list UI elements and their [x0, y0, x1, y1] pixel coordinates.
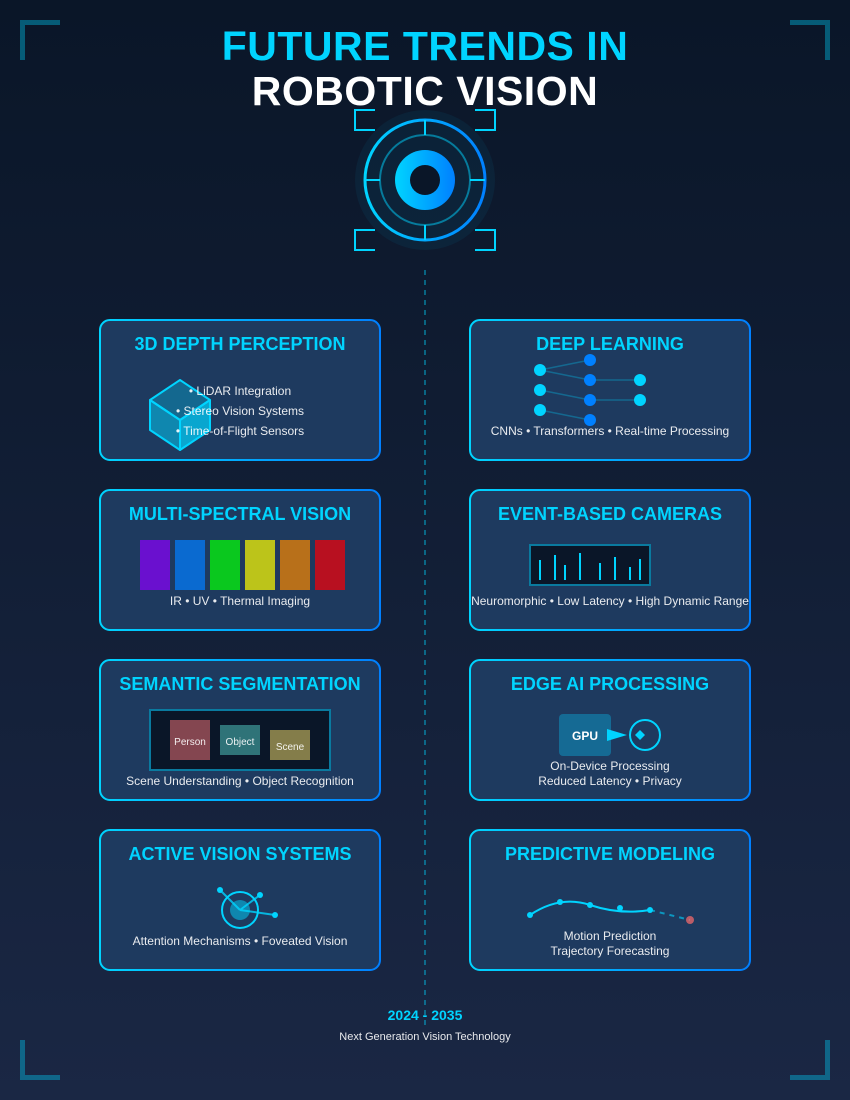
title: ROBOTIC VISION: [252, 68, 598, 114]
icon: neural network: [534, 354, 646, 426]
panel: event-based cameras: Neuromorphic • Low Latency • High Dynamic Range: [471, 594, 749, 608]
panel: predictive modeling: [470, 830, 750, 970]
chart: event spikes: [530, 545, 650, 585]
panel: edge AI processing: On-Device Processing: [550, 759, 670, 773]
panel: 3D depth perception: 3D DEPTH PERCEPTION: [134, 334, 346, 354]
panel: deep learning: CNNs • Transformers • Real-time Processing: [491, 424, 729, 438]
panel: semantic segmentation: [100, 660, 380, 800]
center timeline dashed line: [424, 270, 426, 1030]
panel: 3D depth perception: • Time-of-Flight Sensors: [176, 424, 304, 438]
panel: deep learning: DEEP LEARNING: [536, 334, 684, 354]
panel: semantic segmentation: SEMANTIC SEGMENTATION: [119, 674, 361, 694]
footer: [339, 1007, 511, 1043]
icon: segmented scene: Object: [226, 737, 255, 748]
panel: edge AI processing: [470, 660, 750, 800]
panel: 3D depth perception: [100, 320, 380, 460]
panel: predictive modeling: PREDICTIVE MODELING: [505, 844, 715, 864]
title: [222, 23, 628, 114]
icon: GPU to device: [559, 714, 660, 756]
chart: motion trajectory: [527, 899, 694, 924]
title: FUTURE TRENDS IN: [222, 23, 628, 69]
panel: edge AI processing: EDGE AI PROCESSING: [511, 674, 709, 694]
panel: deep learning: [470, 320, 750, 460]
panel: predictive modeling: Trajectory Forecasting: [551, 944, 669, 958]
panel: multi-spectral vision: IR • UV • Thermal Imaging: [170, 594, 310, 608]
icon: segmented scene: Person: [174, 737, 206, 748]
panel: event-based cameras: [470, 490, 750, 630]
panel: 3D depth perception: • LiDAR Integration: [189, 384, 291, 398]
panel: 3D depth perception: • Stereo Vision Systems: [176, 404, 304, 418]
panel: multi-spectral vision: MULTI-SPECTRAL VISION: [129, 504, 351, 524]
icon: segmented scene: Scene: [276, 742, 305, 753]
icon: GPU to device: GPU: [572, 729, 598, 743]
footer: 2024 - 2035: [388, 1007, 463, 1023]
panel: multi-spectral vision: [100, 490, 380, 630]
panel: active vision systems: Attention Mechanisms • Foveated Vision: [133, 934, 347, 948]
panel: active vision systems: [100, 830, 380, 970]
panel: active vision systems: ACTIVE VISION SYSTEMS: [128, 844, 352, 864]
footer: Next Generation Vision Technology: [339, 1031, 511, 1043]
icon: segmented scene: [150, 710, 330, 770]
icon: depth cube: [150, 380, 210, 450]
icon: central robotic eye: [355, 110, 495, 250]
icon: attention targets: [217, 887, 278, 928]
panel: edge AI processing: Reduced Latency • Privacy: [538, 774, 682, 788]
chart: spectral bands: [140, 540, 345, 590]
panel: predictive modeling: Motion Prediction: [564, 929, 656, 943]
panel: semantic segmentation: Scene Understanding • Object Recognition: [126, 774, 354, 788]
panel: event-based cameras: EVENT-BASED CAMERAS: [498, 504, 722, 524]
